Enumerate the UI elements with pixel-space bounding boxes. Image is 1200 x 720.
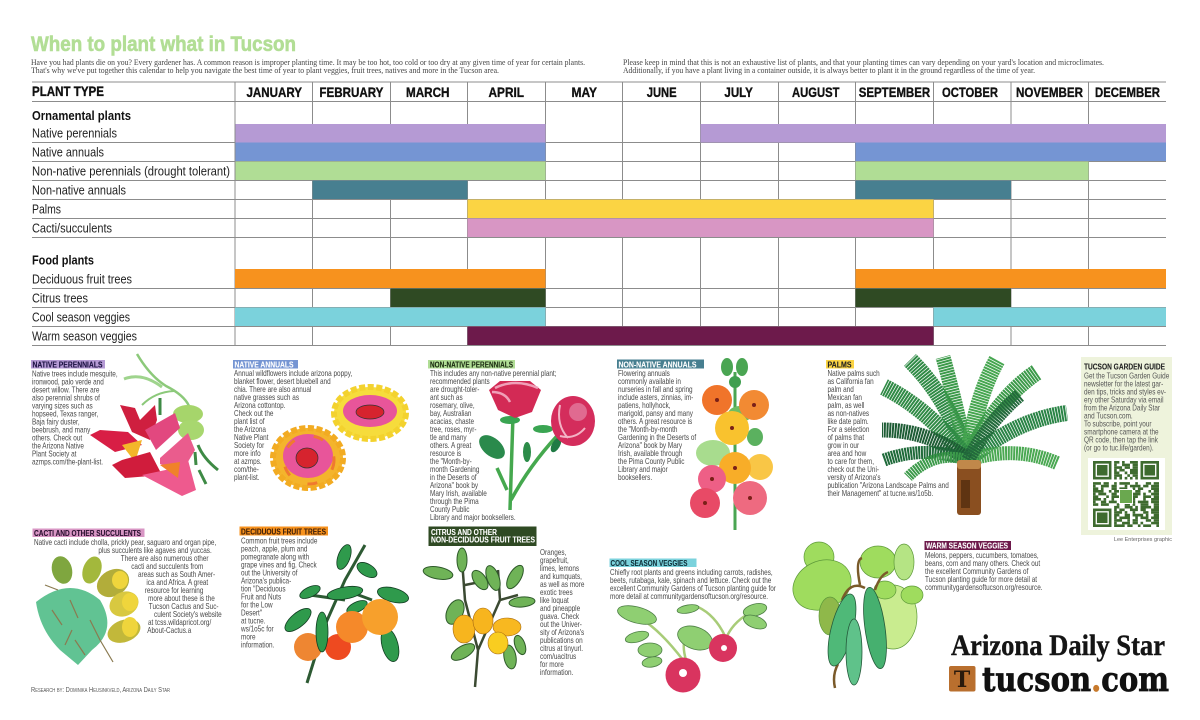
month headers [32, 83, 1160, 100]
text: deciduous fruit trees: peach, apple, plum and [241, 544, 307, 554]
planting calendar [32, 82, 1166, 346]
text: native annuals: chia. There are also annual [234, 384, 312, 394]
text: palms: to care for them, [828, 456, 874, 466]
text: citrus: limes, lemons [540, 563, 579, 573]
text: non-native annuals: patiens, hollyhock, [618, 400, 671, 410]
QR code [1088, 458, 1165, 530]
text: non-native perennials: through the Pima [430, 496, 480, 506]
text: non-native perennials: Library and major booksellers. [430, 512, 516, 522]
text: palms: Mexican fan [828, 392, 862, 402]
text: deciduous fruit trees: Desert" [241, 608, 262, 618]
text: non-native perennials: are drought-toler- [430, 384, 480, 394]
text: deciduous fruit trees: Common fruit trees include [241, 536, 317, 546]
row labels: Native perennials [32, 126, 117, 140]
text: deciduous fruit trees: information. [241, 640, 274, 650]
text: native perennials: also perennial shrubs of [32, 393, 101, 403]
text: cool season veggies: more detail at communitygardensoftucson.org/resource. [610, 591, 768, 601]
title: When to plant what in Tucson [31, 33, 296, 56]
panel: non-native perennials [428, 360, 595, 522]
text: cacti: cacti and succulents from [131, 561, 203, 571]
text: citrus: for more [540, 659, 564, 669]
text: cacti: Native cacti include cholla, prickly pear, saguaro and organ pipe, [34, 537, 216, 547]
text: citrus: as well as more [540, 579, 584, 589]
panel: cacti and other succulents [32, 528, 222, 665]
heading: non-native annuals: NON-NATIVE ANNUALS [618, 360, 697, 369]
panel: native perennials [31, 354, 218, 496]
panel: citrus trees [422, 526, 585, 687]
panel: palms [826, 357, 1067, 515]
text: cacti: About-Cactus.a [147, 625, 192, 635]
logo: Arizona Daily Star: Arizona Daily Star [951, 629, 1165, 662]
heading: tucson garden guide: TUCSON GARDEN GUIDE [1084, 362, 1166, 372]
text: warm season veggies: the excellent Community Gardens of [925, 566, 1029, 576]
text: deciduous fruit trees: Fruit and Nuts [241, 592, 281, 602]
text: citrus: com/uacitrus [540, 651, 577, 661]
text: native annuals: plant list of [234, 416, 265, 426]
heading: citrus [428, 526, 536, 546]
text: native annuals: Society for [234, 440, 265, 450]
text: native annuals: more info [234, 448, 261, 458]
text: native annuals: native grasses such as [234, 392, 299, 402]
text: native perennials: others. Check out [32, 433, 82, 443]
credit: graphic: Lee Enterprises graphic [1114, 537, 1172, 543]
text: citrus: information. [540, 667, 573, 677]
text: deciduous fruit trees: grape vines and fig. Check [241, 560, 317, 570]
text: palms: as California fan [828, 376, 874, 386]
text: native perennials: Native trees include mesquite, [32, 369, 118, 379]
text: citrus: exotic trees [540, 587, 573, 597]
text: non-native perennials: This includes any non-native perennial plant; [430, 368, 556, 378]
text: non-native perennials: tle and many [430, 432, 467, 442]
month headers: JANUARY [246, 84, 303, 100]
month headers: MARCH [406, 84, 450, 100]
heading: native annuals: NATIVE ANNUALS [234, 360, 294, 369]
text: cool season veggies: beets, rutabaga, kale, spinach and lettuce. Check out the [610, 575, 771, 585]
text: warm season veggies: Melons, peppers, cucumbers, tomatoes, [925, 550, 1039, 560]
icon: hollyhock [690, 358, 773, 530]
text: garden guide: from the Arizona Daily Star [1084, 403, 1161, 413]
text: non-native annuals: Arizona" book by Mary [618, 440, 682, 450]
text: native annuals: Annual wildflowers include arizona poppy, [234, 368, 352, 378]
text: citrus: grapefruit, [540, 555, 569, 565]
text: palms: their Management" at tucne.ws/1o5b. [828, 488, 933, 498]
month headers: PLANT TYPE [32, 83, 104, 99]
heading: citrus: CITRUS AND OTHER [431, 528, 497, 537]
text: non-native annuals: others. A great resource is [618, 416, 693, 426]
heading: cacti: CACTI AND OTHER SUCCULENTS [34, 529, 142, 538]
text: deciduous fruit trees: for the Low [241, 600, 273, 610]
panel: native annuals [233, 360, 406, 488]
text: palms: check out the Uni- [828, 464, 880, 474]
text: palms: as non-natives [828, 408, 869, 418]
row labels: Warm season veggies [32, 328, 137, 344]
text: native perennials: desert willow. There are [32, 385, 99, 395]
text: non-native annuals: Irish, available through [618, 448, 682, 458]
row labels: Citrus trees [32, 290, 88, 306]
panel: tucson garden guide [1081, 357, 1172, 535]
text: non-native perennials: in the Deserts of [430, 472, 477, 482]
credit: research: Research by: Dominika Heusinkveld, Arizona Daily Star [31, 687, 170, 694]
month headers: APRIL [488, 84, 524, 100]
text: native perennials: beebrush, and many [32, 425, 91, 435]
row labels: Deciduous fruit trees [32, 272, 132, 286]
text: non-native annuals: include asters, zinnias, im- [618, 392, 694, 402]
heading: native perennials: NATIVE PERENNIALS [32, 360, 103, 369]
text: deciduous fruit trees: ws/1o5c for [240, 624, 274, 634]
text: deciduous fruit trees: pomegranate along with [241, 552, 309, 562]
month headers: JULY [724, 84, 753, 100]
panel: deciduous fruit trees [240, 526, 410, 683]
text: native annuals: the Arizona [234, 424, 267, 434]
text: non-native annuals: Gardening in the Deserts of [618, 432, 697, 442]
text: native annuals: Native Plant [234, 432, 268, 442]
row labels: Cacti/succulents [32, 220, 112, 236]
icon: radishes [616, 601, 768, 692]
text: garden guide: QR code, then tap the link [1084, 435, 1158, 445]
text: non-native perennials: bay, Australian [430, 408, 471, 418]
month headers: DECEMBER [1095, 84, 1160, 100]
icon: palm tree [882, 357, 1067, 515]
icon: cucumber vine [785, 542, 923, 688]
text: non-native annuals: booksellers. [618, 472, 652, 482]
intro text left [31, 58, 585, 75]
text: garden guide: smartphone camera at the [1084, 427, 1159, 437]
text: non-native annuals: Library and major [618, 464, 668, 474]
heading: deciduous fruit trees: DECIDUOUS FRUIT TREES [241, 527, 327, 536]
icon: citrus branch [422, 548, 535, 687]
text: non-native perennials: recommended plants [430, 376, 490, 386]
text: native annuals: plant-list. [234, 472, 260, 482]
month headers: JUNE [647, 84, 677, 100]
text: non-native annuals: nurseries in fall and spring [618, 384, 693, 394]
panel: cool season veggies [610, 558, 776, 692]
text: native perennials: ironwood, palo verde and [32, 377, 104, 387]
text: citrus: publications on [540, 635, 583, 645]
text: non-native perennials: acacias, chaste [430, 416, 474, 426]
text: native annuals: Check out the [234, 408, 273, 418]
intro text right: Additionally, if you have a plant living in a container outside, it is always better to plant it in the ground regardless of the time of year. [623, 66, 1035, 75]
month headers: OCTOBER [942, 84, 998, 100]
heading: warm season veggies: WARM SEASON VEGGIES [926, 542, 1009, 551]
text: deciduous fruit trees: more [241, 632, 256, 642]
text: palms: palm, as well [828, 400, 865, 410]
text: non-native annuals: the Pima County Public [618, 456, 685, 466]
text: non-native annuals: commonly available in [618, 376, 681, 386]
month headers: FEBRUARY [319, 84, 384, 100]
text: palms: area and how [828, 448, 867, 458]
text: warm season veggies: communitygardensoftucson.org/resource. [925, 582, 1043, 592]
text: palms: of palms that [828, 432, 864, 442]
row labels: Non-native annuals [32, 182, 126, 198]
panel: warm season veggies [785, 541, 1043, 688]
text: non-native perennials: County Public [430, 504, 470, 514]
text: warm season veggies: beans, corn and many others. Check out [925, 558, 1040, 568]
text: native perennials: the Arizona Native [32, 441, 84, 451]
text: garden guide: To subscribe, point your [1084, 419, 1152, 429]
text: non-native perennials: Mary Irish, available [430, 488, 487, 498]
text: garden guide: Get the Tucson Garden Guide [1084, 371, 1169, 381]
text: palms: Native palms such [828, 368, 880, 378]
text: non-native annuals: marigold, pansy and many [618, 408, 693, 418]
row labels: Palms [32, 202, 61, 216]
text: garden guide: newsletter for the latest gar- [1084, 379, 1164, 389]
text: non-native annuals: Flowering annuals [618, 368, 670, 378]
text: warm season veggies: Tucson planting guide for more detail at [925, 574, 1037, 584]
row labels [32, 108, 230, 344]
text: citrus: like loquat [540, 595, 569, 605]
text: native perennials: Plant Society at [32, 449, 76, 459]
text: cacti: areas such as South Amer- [138, 569, 216, 579]
text: non-native perennials: resource is [430, 448, 462, 458]
text: cacti: There are also numerous other [121, 553, 209, 563]
text: native annuals: com/the- [234, 464, 259, 474]
text: native perennials: varying sizes such as [32, 401, 93, 411]
text: non-native perennials: month Gardening [430, 464, 479, 474]
text: garden guide: (or go to tuc.life/garden). [1084, 443, 1154, 453]
text: cacti: culent Society's website [154, 609, 222, 619]
text: native perennials: hopseed, Texas ranger, [32, 409, 98, 419]
logo: tucson.com: T [954, 667, 971, 693]
text: native perennials: azmps.com/the-plant-list. [32, 457, 103, 467]
text: garden guide: den tips, tricks and styles ev- [1084, 387, 1167, 397]
month headers: AUGUST [792, 84, 840, 100]
text: palms: publication "Arizona Landscape Palms and [828, 480, 949, 490]
text: palms: versity of Arizona's [828, 472, 881, 482]
text: palms: like date palm. [828, 416, 869, 426]
text: garden guide: ery other Saturday via email [1084, 395, 1164, 405]
icon: peach branch [281, 543, 410, 683]
text: cacti: Tucson Cactus and Suc- [149, 601, 219, 611]
heading: non-native perennials: NON-NATIVE PERENNIALS [430, 360, 514, 369]
text: palms: grow in our [828, 440, 860, 450]
text: citrus: sity of Arizona's [540, 627, 585, 637]
text: cacti: at tcss.wildapricot.org/ [148, 617, 212, 627]
text: citrus: out the Univer- [540, 619, 582, 629]
text: native perennials: Baja fairy duster, [32, 417, 80, 427]
text: cacti: more about these is the [148, 593, 215, 603]
text: deciduous fruit trees: at tucne. [241, 616, 266, 626]
month headers: NOVEMBER [1016, 84, 1083, 100]
month headers: MAY [572, 84, 598, 100]
intro text right [623, 58, 1104, 75]
text: non-native perennials: ant such as [430, 392, 463, 402]
text: non-native perennials: the "Month-by- [430, 456, 472, 466]
icon: roses [475, 381, 595, 510]
intro text left: That's why we've put together this calendar to help you navigate the best time of year to plant veggies, fruit trees, natives and more in the Tucson area. [31, 66, 499, 75]
month headers: SEPTEMBER [859, 84, 930, 100]
text: native annuals: Arizona cottontop. [234, 400, 286, 410]
text: non-native perennials: others. A great [430, 440, 471, 450]
text: cool season veggies: Chiefly root plants and greens including carrots, radishes, [610, 567, 773, 577]
text: cacti: plus succulents like agaves and yuccas. [98, 545, 212, 555]
text: native annuals: at azmps. [234, 456, 262, 466]
text: deciduous fruit trees: out the University of [241, 568, 298, 578]
row labels: Ornamental plants [32, 108, 131, 123]
planting period bars [235, 124, 1166, 345]
text: citrus: and pineapple [540, 603, 580, 613]
heading: cool season veggies: COOL SEASON VEGGIES [610, 559, 688, 568]
row labels: Cool season veggies [32, 310, 130, 324]
text: non-native perennials: tree, roses, myr- [430, 424, 477, 434]
text: palms: palm and [828, 384, 854, 394]
intro text right: Please keep in mind that this is not an exhaustive list of plants, and that your planting times can vary depending on your yard's location and microclimates. [623, 58, 1104, 67]
logo: tucson.com: tucson.com [982, 660, 1169, 700]
intro text left: Have you had plants die on you? Every gardener has. A common reason is improper planting time. It may be too hot, too cold or too dry at any given time of year for certain plants. [31, 58, 585, 67]
text: citrus: Oranges, [540, 547, 566, 557]
text: deciduous fruit trees: Arizona's publica- [241, 576, 292, 586]
text: garden guide: and Tucson.com. [1084, 411, 1133, 421]
heading: citrus: NON-DECIDUOUS FRUIT TREES [431, 536, 536, 545]
text: native annuals: blanket flower, desert bluebell and [234, 376, 331, 386]
text: citrus: citrus at tinyurl. [540, 643, 583, 653]
row labels: Food plants [32, 252, 94, 268]
text: cool season veggies: excellent Community Gardens of Tucson planting guide for [610, 583, 776, 593]
text: citrus: and kumquats, [540, 571, 582, 581]
text: cacti: resource for learning [145, 585, 203, 595]
row labels: Native annuals [32, 144, 104, 160]
text: deciduous fruit trees: tion "Deciduous [241, 584, 286, 594]
icon: blanket flowers [273, 387, 406, 488]
text: non-native annuals: the "Month-by-month [618, 424, 677, 434]
heading: palms: PALMS [828, 360, 852, 369]
icon: prickly pear cactus [36, 554, 144, 665]
text: palms: For a selection [828, 424, 869, 434]
row labels: Non-native perennials (drought tolerant) [32, 164, 230, 178]
text: non-native perennials: rosemary, olive, [430, 400, 475, 410]
text: non-native perennials: Arizona" book by [430, 480, 478, 490]
panel: non-native annuals [617, 358, 773, 530]
text: citrus: guava. Check [540, 611, 579, 621]
text: cacti: ica and Africa. A great [146, 577, 208, 587]
icon: trumpet flower [90, 354, 218, 496]
